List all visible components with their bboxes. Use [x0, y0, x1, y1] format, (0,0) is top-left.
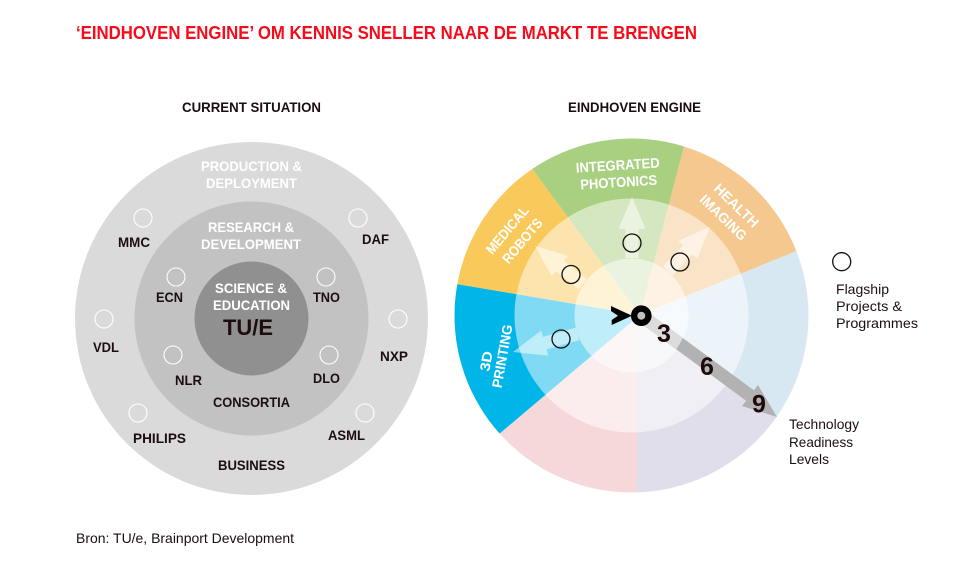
organisation labels: NLR: [175, 372, 202, 388]
sector labels: MEDICAL: [482, 202, 532, 257]
organisation labels: DLO: [313, 370, 340, 386]
marker circles: [95, 209, 407, 422]
TRL numbers: [657, 320, 766, 418]
legend: flagship projects: Flagship: [836, 281, 889, 297]
ring: production and deployment / business: [75, 142, 428, 495]
legend: flagship projects: Projects &: [836, 298, 903, 314]
legend: technology readiness levels: Readiness: [789, 434, 853, 450]
wheel sectors: [454, 138, 808, 492]
TRL arrow: [638, 310, 777, 417]
organisation labels: VDL: [93, 339, 119, 355]
panel: eindhoven engine wheel: [454, 138, 808, 492]
legend: flagship projects: [833, 253, 918, 331]
TRL numbers: 6: [700, 353, 714, 381]
legend: flagship projects: Programmes: [836, 315, 918, 331]
panel: current situation diagram: [75, 142, 428, 495]
legend: technology readiness levels: [789, 416, 859, 467]
organisation labels: NXP: [380, 348, 408, 364]
organisation labels: CONSORTIA: [213, 394, 290, 410]
sector labels: HEALTH: [711, 180, 762, 231]
overlay rings: [514, 198, 748, 432]
organisation labels: ASML: [328, 427, 365, 443]
organisation labels: [93, 231, 408, 473]
centre ring: [634, 309, 648, 323]
source note: Bron: TU/e, Brainport Development: [76, 530, 294, 546]
organisation labels: BUSINESS: [218, 457, 285, 473]
organisation labels: DAF: [362, 231, 389, 247]
legend: technology readiness levels: Levels: [789, 451, 829, 467]
ring headings: [201, 158, 302, 313]
TRL numbers: 3: [657, 320, 671, 348]
heading: eindhoven engine: EINDHOVEN ENGINE: [568, 99, 701, 115]
organisation labels: TNO: [313, 289, 340, 305]
organisation labels: MMC: [118, 234, 150, 250]
ring headings: DEPLOYMENT: [206, 175, 297, 191]
sector labels: PRINTING: [489, 323, 516, 389]
sector labels: IMAGING: [697, 191, 750, 244]
organisation labels: ECN: [156, 289, 183, 305]
flagship markers: [552, 234, 689, 348]
organisation labels: PHILIPS: [133, 430, 186, 446]
ring headings: EDUCATION: [213, 297, 290, 313]
legend: technology readiness levels: Technology: [789, 416, 859, 432]
label: TU/E: TU/E: [223, 315, 273, 340]
ring headings: RESEARCH &: [208, 219, 294, 235]
ring headings: PRODUCTION &: [201, 158, 302, 174]
heading: current situation: CURRENT SITUATION: [182, 99, 321, 115]
ring: research and development / consortia: [134, 202, 368, 436]
sector labels: [476, 154, 762, 389]
title: ‘EINDHOVEN ENGINE’ OM KENNIS SNELLER NAAR DE MARKT TE BRENGEN: [76, 23, 697, 43]
sector labels: INTEGRATED: [575, 154, 660, 176]
core: science and education: [194, 262, 308, 376]
centre chevron: [611, 306, 632, 325]
outward arrows: [509, 197, 719, 365]
ring headings: DEVELOPMENT: [201, 236, 301, 252]
ring headings: SCIENCE &: [215, 280, 287, 296]
sector labels: 3D: [476, 350, 496, 372]
sector labels: ROBOTS: [499, 215, 546, 267]
sector labels: PHOTONICS: [580, 172, 658, 192]
TRL numbers: 9: [752, 390, 766, 418]
